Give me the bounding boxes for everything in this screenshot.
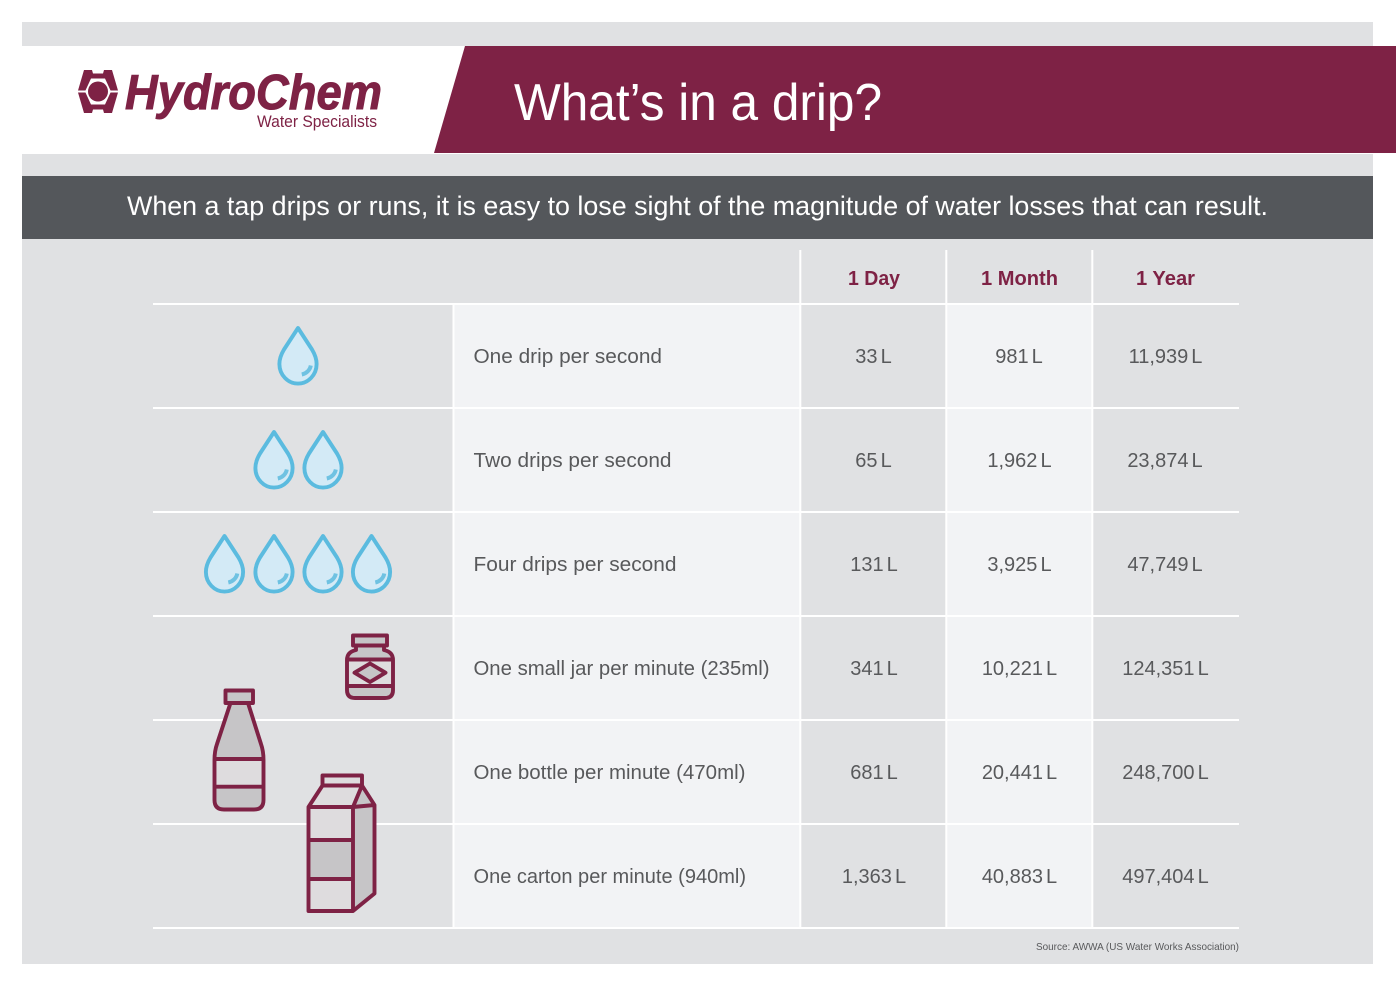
row: two drips per second: 23,874 L — [1127, 450, 1203, 472]
row: four drips per second — [474, 554, 1203, 576]
column headers: 1 Year — [1136, 268, 1195, 290]
row: two drips per second: 1,962 L — [987, 450, 1052, 472]
column headers: 1 Month — [981, 268, 1058, 290]
row: two drips per second: Two drips per second — [474, 450, 672, 472]
row: one drip per second: 33 L — [855, 346, 892, 368]
row: one drip per second — [474, 346, 1202, 368]
row: one bottle per minute — [474, 762, 1209, 784]
row: four drips per second: Four drips per second — [474, 554, 676, 576]
title banner — [434, 46, 1396, 153]
row: one bottle per minute: 248,700 L — [1122, 762, 1209, 784]
row: one carton per minute — [474, 866, 1209, 888]
icon: bottle — [214, 690, 264, 810]
icon: two drops — [255, 432, 342, 488]
icon: jar — [347, 636, 393, 698]
row: one small jar per minute: 341 L — [850, 658, 898, 680]
row: one carton per minute: 497,404 L — [1122, 866, 1209, 888]
icon: one drop — [279, 328, 317, 384]
row: one small jar per minute: 124,351 L — [1122, 658, 1209, 680]
row: two drips per second — [474, 450, 1203, 472]
icon: hex nut logo mark — [78, 70, 118, 113]
logo — [78, 66, 382, 131]
row: one drip per second: 981 L — [995, 346, 1043, 368]
icon: four drops — [206, 536, 390, 592]
title: What’s in a drip? — [514, 74, 882, 132]
row: one small jar per minute: One small jar per minute (235ml) — [474, 658, 770, 680]
subtitle bar — [22, 176, 1373, 239]
row: one carton per minute: 40,883 L — [982, 866, 1057, 888]
row: two drips per second: 65 L — [855, 450, 892, 472]
row: one small jar per minute — [474, 658, 1209, 680]
row: one bottle per minute: One bottle per minute (470ml) — [474, 762, 746, 784]
column headers — [848, 268, 1195, 290]
row: one drip per second: One drip per second — [474, 346, 662, 368]
column headers: 1 Day — [848, 268, 901, 290]
row: four drips per second: 131 L — [850, 554, 898, 576]
subtitle bar: When a tap drips or runs, it is easy to lose sight of the magnitude of water losses that can result. — [127, 191, 1268, 221]
header band — [22, 46, 1396, 154]
table — [153, 250, 1239, 929]
row: four drips per second: 3,925 L — [987, 554, 1052, 576]
logo wordmark: HydroChem — [125, 66, 382, 120]
row: one small jar per minute: 10,221 L — [982, 658, 1057, 680]
logo tagline: Water Specialists — [257, 112, 377, 131]
row: one carton per minute: 1,363 L — [842, 866, 906, 888]
row: one drip per second: 11,939 L — [1129, 346, 1202, 368]
row: four drips per second: 47,749 L — [1127, 554, 1203, 576]
icon: milk carton — [308, 776, 374, 911]
table shaded columns — [454, 305, 1092, 928]
row: one carton per minute: One carton per minute (940ml) — [474, 866, 746, 888]
source note: Source: AWWA (US Water Works Association) — [1036, 941, 1239, 953]
row: one bottle per minute: 681 L — [850, 762, 898, 784]
row: one bottle per minute: 20,441 L — [982, 762, 1057, 784]
